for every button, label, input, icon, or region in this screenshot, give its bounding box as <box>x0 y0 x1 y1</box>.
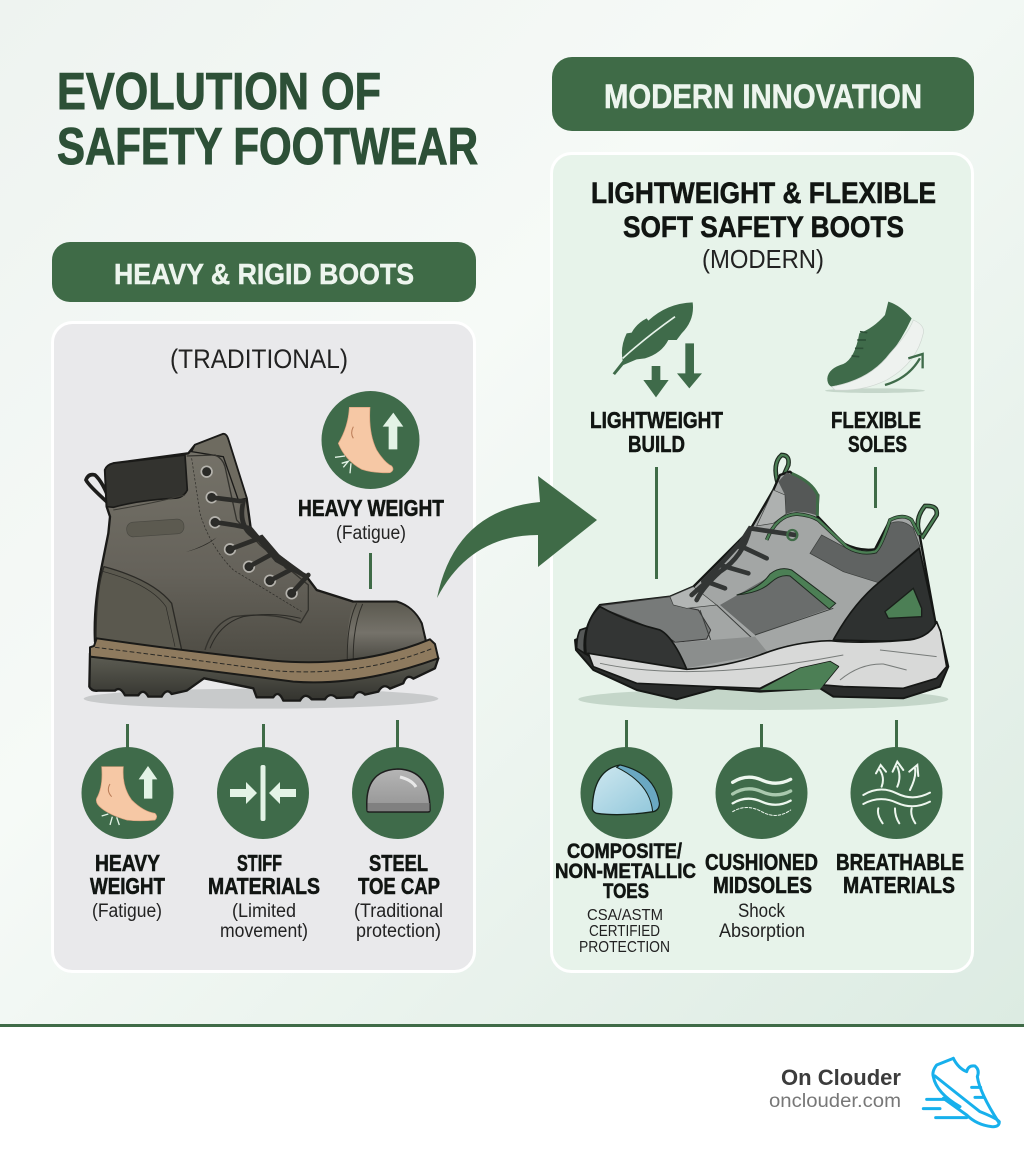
footer brand: on clouder: On Clouder <box>781 1065 901 1090</box>
feature: heavy weight <box>82 724 174 922</box>
feature: cushioned midsoles: MIDSOLES <box>713 872 812 898</box>
feature: stiff materials: MATERIALS <box>208 873 320 899</box>
illustration: traditional work boot <box>84 434 438 709</box>
feature: composite toes: TOES <box>603 880 649 903</box>
feature: heavy weight: (Fatigue) <box>92 901 162 922</box>
feature: heavy weight: WEIGHT <box>90 873 165 899</box>
feature: composite toes: CSA/ASTM <box>587 907 663 924</box>
panel heading: lightweight and flexible <box>591 177 936 274</box>
feature: cushioned midsoles: Shock <box>738 901 785 922</box>
feature: steel toe cap: protection) <box>356 921 441 942</box>
feature: stiff materials <box>208 724 320 942</box>
feature: stiff materials: (Limited <box>232 901 296 922</box>
feature: steel toe cap: (Traditional <box>354 901 443 922</box>
panel heading: lightweight and flexible: LIGHTWEIGHT & FLEXIBLE <box>591 177 936 210</box>
feature: composite toes: PROTECTION <box>579 939 670 956</box>
heading pill: modern innovation <box>552 57 974 131</box>
feature: composite toes: NON-METALLIC <box>555 860 696 883</box>
heading pill: heavy and rigid boots: HEAVY & RIGID BOOTS <box>114 259 414 291</box>
illustration: modern soft safety boot <box>575 455 948 710</box>
feature: lightweight build <box>590 302 723 579</box>
callout: heavy weight top <box>298 391 444 589</box>
feature: flexible soles: SOLES <box>848 431 907 457</box>
footer brand: on clouder: onclouder.com <box>769 1091 901 1112</box>
footer brand: on clouder <box>769 1058 999 1127</box>
panel: modern boots <box>552 154 972 972</box>
feature: stiff materials: movement) <box>220 921 308 942</box>
feature: flexible soles <box>825 302 925 508</box>
feature: stiff materials: STIFF <box>237 850 282 876</box>
feature: cushioned midsoles: Absorption <box>719 921 805 942</box>
feature: composite toes: CERTIFIED <box>589 923 660 940</box>
heading pill: heavy and rigid boots <box>52 242 476 302</box>
feature: lightweight build: LIGHTWEIGHT <box>590 407 723 433</box>
callout: heavy weight top: HEAVY WEIGHT <box>298 495 444 521</box>
feature: cushioned midsoles <box>705 724 818 942</box>
arrow: traditional to modern <box>437 476 597 598</box>
title: EVOLUTION OF <box>57 63 381 121</box>
feature: breathable materials <box>836 720 964 898</box>
feature: lightweight build: BUILD <box>628 431 685 457</box>
feature: steel toe cap <box>352 720 444 942</box>
panel: traditional boots <box>52 322 474 972</box>
feature: composite toes: COMPOSITE/ <box>567 840 682 863</box>
callout: heavy weight top: (Fatigue) <box>336 523 406 544</box>
feature: breathable materials: MATERIALS <box>843 872 955 898</box>
icon: running shoe logo <box>923 1058 999 1127</box>
feature: heavy weight: HEAVY <box>95 850 160 876</box>
panel label: traditional: (TRADITIONAL) <box>170 344 348 374</box>
panel heading: lightweight and flexible: SOFT SAFETY BOOTS <box>623 211 904 244</box>
title: SAFETY FOOTWEAR <box>57 118 478 176</box>
footer band <box>0 1024 1024 1154</box>
feature: steel toe cap: STEEL <box>369 850 428 876</box>
feature: breathable materials: BREATHABLE <box>836 849 964 875</box>
title <box>57 63 478 176</box>
heading pill: modern innovation: MODERN INNOVATION <box>604 78 922 116</box>
feature: cushioned midsoles: CUSHIONED <box>705 849 818 875</box>
feature: composite toes <box>555 720 696 956</box>
feature: steel toe cap: TOE CAP <box>358 873 440 899</box>
feature: flexible soles: FLEXIBLE <box>831 407 921 433</box>
panel heading: lightweight and flexible: (MODERN) <box>702 244 824 274</box>
